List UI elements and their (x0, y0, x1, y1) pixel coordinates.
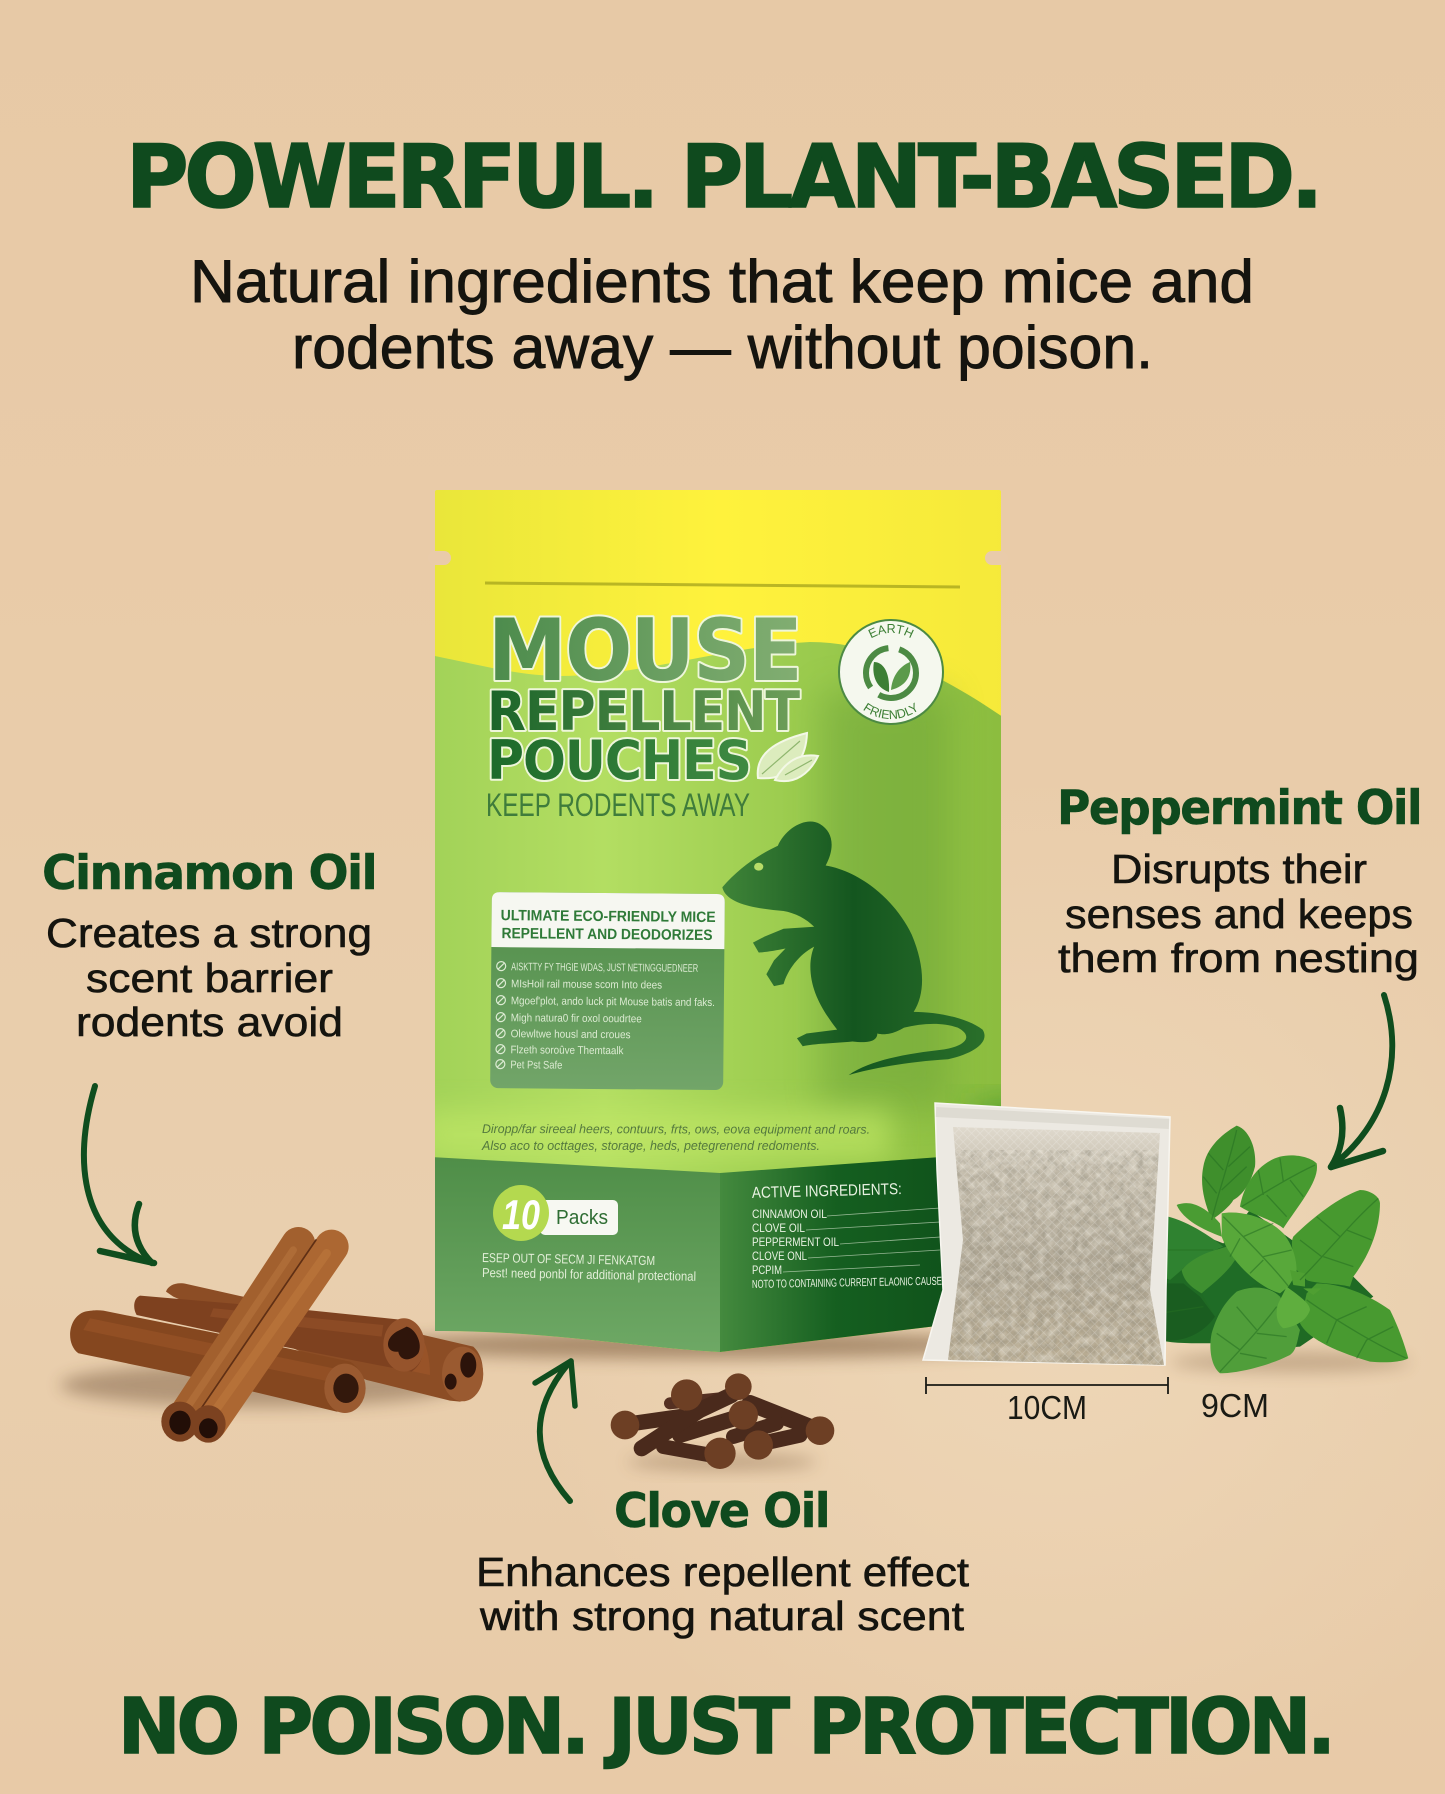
check icons (496, 962, 506, 1069)
subtitle: Natural ingredients that keep mice and (190, 248, 1254, 315)
box checklist: Migh natura0 fir oxol ooudrtee (511, 1012, 642, 1025)
box heading: REPELLENT AND DEODORIZES (501, 925, 713, 944)
box checklist: AISKTTY FY THGIE WDAS, JUST NETINGGUEDNEER (511, 961, 698, 975)
box checklist (510, 961, 715, 1073)
active ingredients: CLOVE ONL (752, 1251, 808, 1263)
clove oil description: with strong natural scent (479, 1593, 965, 1639)
feature box (490, 892, 725, 1090)
cinnamon sticks (70, 1240, 483, 1443)
front upper sticks (161, 1240, 332, 1443)
width dimension line (926, 1377, 1168, 1394)
box checklist: MIsHoil rail mouse scom Into dees (511, 978, 663, 992)
rear stick (166, 1283, 483, 1402)
active ingredients: NOTO TO CONTAINING CURRENT ELAONIC CAUSE (752, 1276, 942, 1291)
box checklist: Pet Pst Safe (510, 1059, 562, 1072)
mint leaves (1150, 1126, 1410, 1373)
cinnamon oil description: Creates a strong (46, 910, 372, 956)
active ingredients (752, 1181, 942, 1291)
zipper line (485, 583, 960, 587)
pouch tagline: KEEP RODENTS AWAY (486, 787, 750, 823)
pouch warning text: Pest! need ponbl for additional protectional (482, 1265, 696, 1284)
subtitle: rodents away — without poison. (292, 314, 1153, 381)
cinnamon oil heading: Cinnamon Oil (42, 846, 376, 901)
active ingredients: CINNAMON OIL (752, 1209, 828, 1221)
active ingredients: PCPIM (752, 1265, 782, 1277)
bottom panel right (720, 1157, 942, 1352)
dimension labels: 9CM (1201, 1387, 1269, 1424)
ten packs badge (493, 1185, 618, 1241)
box checklist: Olewltwe housl and croues (511, 1028, 631, 1041)
subtitle (190, 248, 1254, 381)
pouch directions text: Diropp/far sireeal heers, contuurs, frts, ows, eova equipment and roars. (482, 1122, 870, 1137)
earth friendly badge: EARTH (868, 624, 914, 638)
pouch warning text: ESEP OUT OF SECM JI FENKATGM (482, 1250, 655, 1268)
dimension labels (1007, 1387, 1269, 1426)
ten packs badge: 10 (502, 1191, 540, 1238)
box checklist: Mgoef'plot, ando luck pit Mouse batis and faks. (511, 995, 715, 1009)
cinnamon shadow (60, 1363, 460, 1407)
middle stick (134, 1296, 425, 1372)
pouch brand title: POUCHES (487, 729, 751, 792)
centre leaf (1222, 1212, 1297, 1293)
pouch notches (428, 551, 1008, 565)
pouch warning text (482, 1250, 696, 1284)
peppermint arrow (1331, 995, 1392, 1167)
cinnamon oil description (46, 910, 372, 1045)
upper leaves (1202, 1126, 1255, 1220)
dimension labels: 10CM (1007, 1389, 1087, 1426)
box checklist: Flzeth soroûve Themtaalk (510, 1044, 624, 1057)
pouch brand title: MOUSE (488, 601, 801, 701)
cinnamon oil description: rodents avoid (76, 999, 343, 1045)
pouch brand title: MOUSE (488, 601, 801, 701)
bottom panel left (430, 1157, 720, 1360)
clove oil description: Enhances repellent effect (476, 1549, 970, 1595)
lower leaves (1300, 1283, 1408, 1362)
product shadow (380, 1331, 1020, 1359)
peppermint oil heading: Peppermint Oil (1057, 781, 1421, 836)
title: POWERFUL. PLANT-BASED. (126, 126, 1319, 228)
pouch brand title: REPELLENT (487, 680, 800, 743)
clove oil description (476, 1549, 970, 1639)
active ingredients: CLOVE OIL (752, 1223, 806, 1235)
front lower stick (70, 1310, 366, 1413)
leaf icon on pouch (758, 733, 818, 781)
peppermint oil description: them from nesting (1058, 935, 1419, 981)
pouch brand title: REPELLENT (487, 680, 800, 743)
tea bag sachet (923, 1103, 1170, 1370)
ten packs badge: Packs (556, 1207, 608, 1229)
active ingredients: PEPPERMENT OIL (752, 1237, 840, 1249)
clove oil heading: Clove Oil (614, 1484, 829, 1539)
peppermint oil description (1058, 846, 1419, 981)
box heading (500, 907, 716, 944)
pouch directions text: Also aco to octtages, storage, heds, petegrenend redoments. (481, 1139, 820, 1153)
peppermint oil description: senses and keeps (1065, 891, 1413, 937)
pouch brand title (487, 601, 801, 792)
pouch directions text (481, 1122, 870, 1153)
dark back foliage (1150, 1210, 1373, 1348)
peppermint oil description: Disrupts their (1111, 846, 1367, 892)
product pouch (420, 485, 1035, 1365)
footer slogan: NO POISON. JUST PROTECTION. (118, 1683, 1332, 1772)
cinnamon oil description: scent barrier (86, 955, 333, 1001)
green wave (430, 642, 1010, 1360)
earth friendly badge (838, 619, 944, 725)
pouch brand title: POUCHES (487, 729, 751, 792)
active ingredients: ACTIVE INGREDIENTS: (752, 1181, 902, 1202)
leaf veins (1160, 1130, 1407, 1372)
earth friendly badge: FRIENDLY (863, 702, 916, 720)
cinnamon arrow (84, 1086, 154, 1263)
box heading: ULTIMATE ECO-FRIENDLY MICE (501, 907, 716, 926)
mouse silhouette (722, 822, 985, 1075)
clove arrow (535, 1361, 575, 1501)
cloves (611, 1373, 834, 1470)
